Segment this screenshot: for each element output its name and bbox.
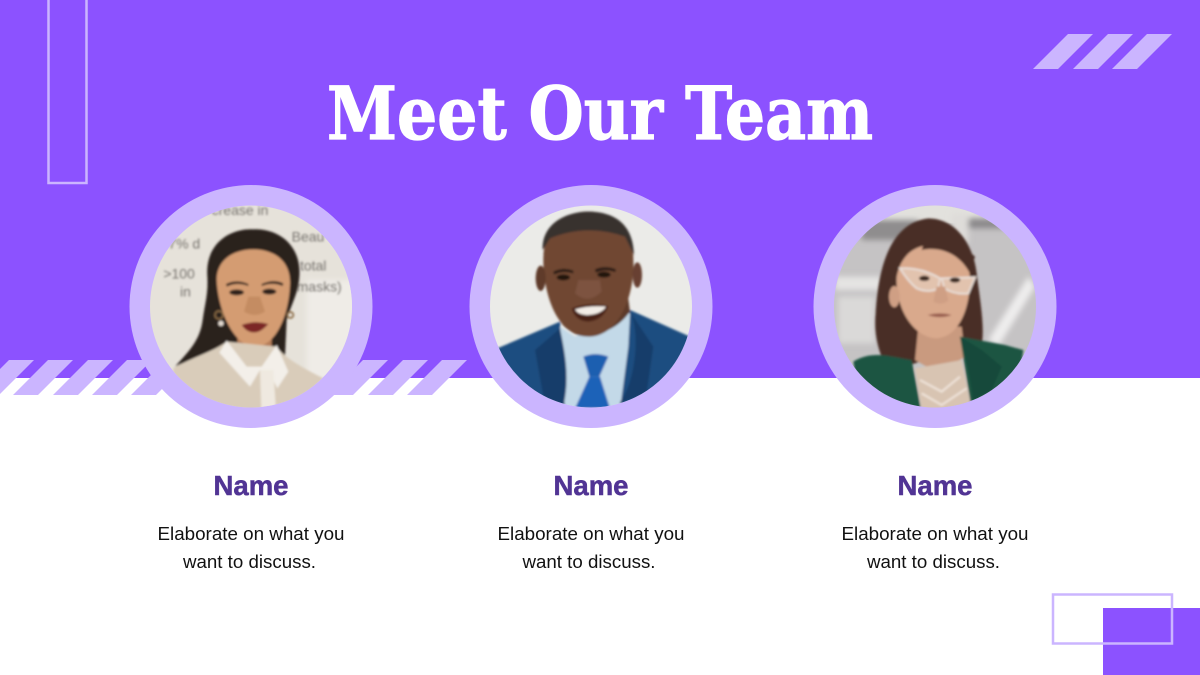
whiteboard handwriting: 7% d <box>168 235 200 251</box>
decorative filled block bottom right <box>1103 608 1200 675</box>
team member 2 text <box>498 470 684 572</box>
team member 3 text: Name <box>898 470 972 501</box>
team member 2 text: want to discuss. <box>521 552 656 572</box>
whiteboard handwriting: total <box>300 258 326 274</box>
team member 2 portrait <box>470 185 712 428</box>
whiteboard handwriting: Beau <box>292 229 324 245</box>
team member 1 text: Elaborate on what you <box>158 524 344 544</box>
purple header band <box>0 0 1200 378</box>
team member 1 text: want to discuss. <box>182 552 316 572</box>
team member 3 text <box>842 470 1028 572</box>
whiteboard handwriting: in <box>180 284 191 300</box>
team member 2 text: Elaborate on what you <box>498 524 684 544</box>
team member 3 text: Elaborate on what you <box>842 524 1028 544</box>
whiteboard handwriting: crease in <box>212 202 268 218</box>
title: Meet Our Team <box>327 71 873 157</box>
decorative outline rectangle top left <box>48 0 86 183</box>
team member 1 portrait <box>130 185 372 428</box>
team member 1 text: Name <box>214 470 288 501</box>
team member 3 portrait <box>814 185 1056 428</box>
whiteboard handwriting: >100 <box>163 265 195 281</box>
decorative outline rectangle bottom right <box>1053 594 1172 644</box>
team member 2 text: Name <box>554 470 628 501</box>
team member 1 text <box>158 470 344 572</box>
whiteboard handwriting: masks) <box>297 279 342 295</box>
whiteboard handwriting <box>163 202 342 300</box>
team member 3 text: want to discuss. <box>866 552 1000 572</box>
decorative stripes across band edge <box>0 360 467 395</box>
decorative stripes top right <box>1033 34 1172 69</box>
